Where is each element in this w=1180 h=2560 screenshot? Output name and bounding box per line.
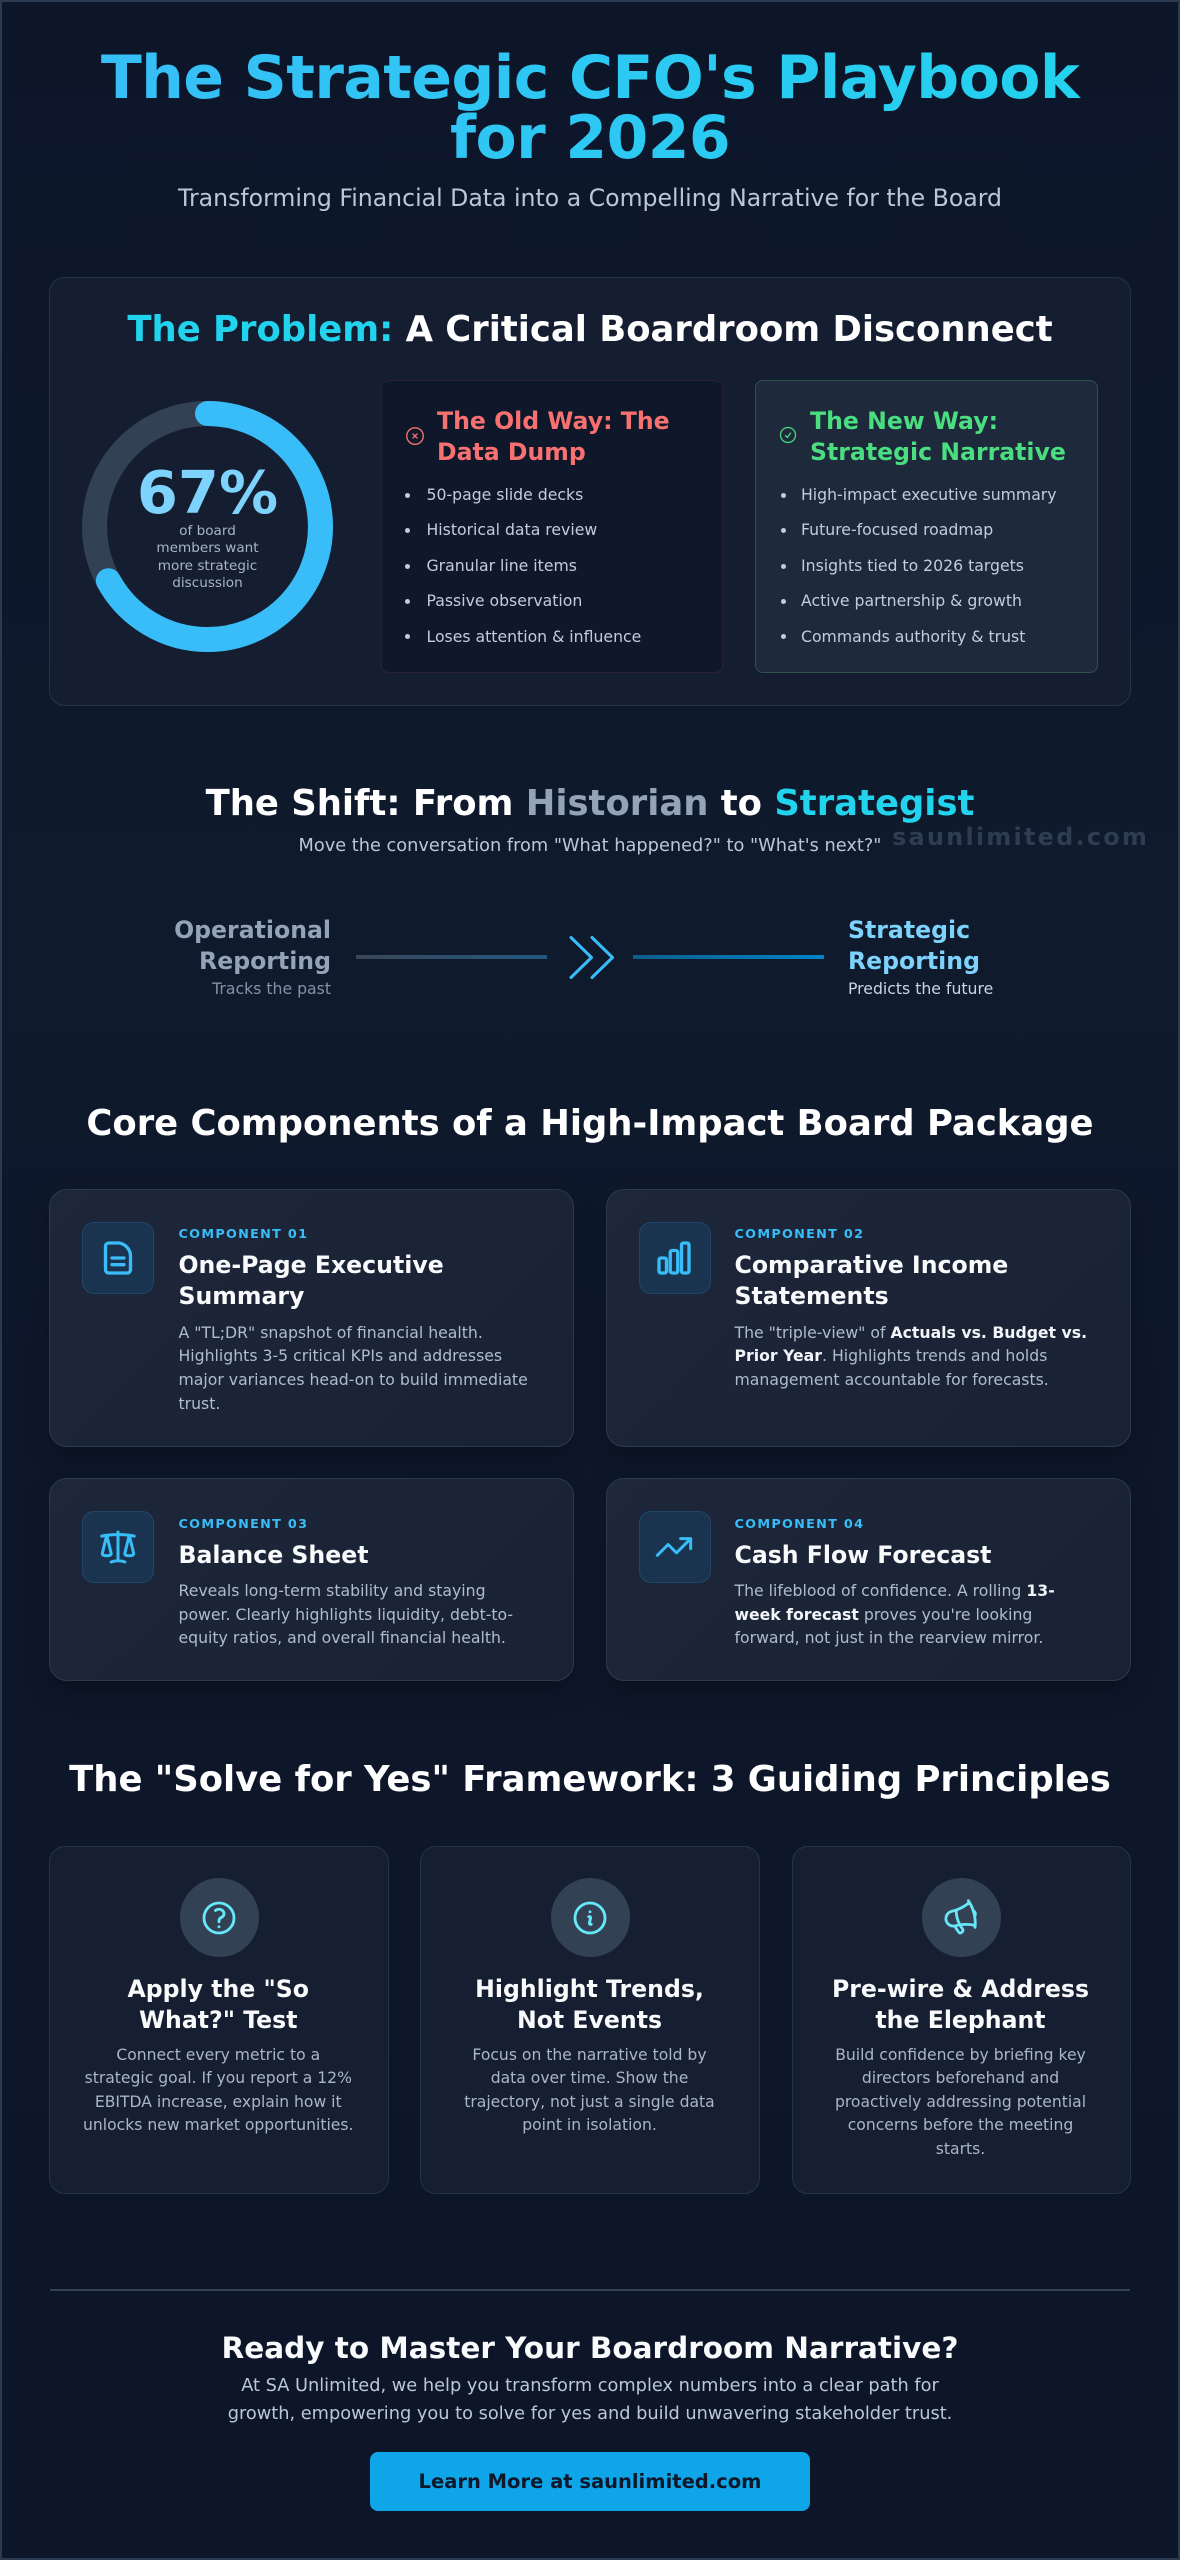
card title: What?" Test (139, 2006, 298, 2034)
panel: the new way (755, 380, 1098, 673)
card title (734, 1251, 1008, 1310)
shift: operational reporting: Operational (174, 916, 331, 944)
donut chart: 67 percent (82, 401, 333, 652)
card body: trajectory, not just a single data (464, 2093, 715, 2111)
text: call to action: growth, empowering you to solve for yes and build unwavering stakeholder trust. (228, 2404, 952, 2424)
panel: the problem (49, 277, 1131, 706)
list: new way: Insights tied to 2026 targets (801, 556, 1024, 575)
list: old way (426, 485, 641, 646)
card title: the Elephant (875, 2006, 1046, 2034)
label: COMPONENT 02 (734, 1227, 864, 1242)
label: COMPONENT 03 (178, 1517, 308, 1532)
card title: Comparative Income (734, 1251, 1008, 1279)
icon: megaphone (922, 1878, 1000, 1957)
heading: the problem: The Problem: A Critical Boardroom Disconnect (127, 309, 1053, 350)
card title: Cash Flow Forecast (734, 1541, 991, 1569)
card body: trust. (178, 1394, 220, 1413)
card: component 02 (606, 1189, 1130, 1447)
card body: Prior Year. Highlights trends and holds (734, 1346, 1047, 1365)
heading: the shift: The Shift: From Historian to Strategist (206, 783, 974, 824)
list: old way: Granular line items (426, 556, 577, 575)
card body (835, 2046, 1086, 2158)
card title: One-Page Executive (178, 1251, 444, 1279)
watermark: saunlimited.com (892, 823, 1149, 851)
heading: call to action: Ready to Master Your Boardroom Narrative? (222, 2331, 958, 2365)
card body (734, 1323, 1087, 1389)
card body (734, 1581, 1055, 1647)
list: old way: Historical data review (426, 520, 597, 539)
card body: strategic goal. If you report a 12% (85, 2069, 352, 2087)
icon: x circle (406, 427, 424, 445)
card body: concerns before the meeting (848, 2116, 1073, 2134)
card title: Highlight Trends, (475, 1974, 704, 2002)
card: component 04 (606, 1478, 1130, 1681)
heading: new way: Strategic Narrative (810, 438, 1066, 466)
list: new way: Active partnership & growth (801, 591, 1022, 610)
shift: operational reporting: Reporting (199, 947, 331, 975)
icon: question (180, 1878, 258, 1957)
icon: bar chart (638, 1222, 710, 1294)
list: new way: Future-focused roadmap (801, 520, 993, 539)
heading: new way (810, 406, 1066, 466)
card title (475, 1974, 704, 2034)
card body (178, 1323, 528, 1413)
card title: Apply the "So (127, 1974, 309, 2002)
card body (178, 1581, 513, 1647)
label: COMPONENT 01 (178, 1227, 308, 1242)
card body: unlocks new market opportunities. (83, 2116, 353, 2134)
card title: Not Events (517, 2006, 662, 2034)
card body: The "triple-view" of Actuals vs. Budget vs. (734, 1323, 1087, 1342)
button: learn more: Learn More at saunlimited.com (419, 2470, 761, 2493)
line: left connector (356, 955, 547, 959)
shift: strategic reporting: Predicts the future (848, 979, 993, 998)
list: new way (801, 485, 1057, 646)
card body: Reveals long-term stability and staying (178, 1581, 486, 1600)
heading: core components: Core Components of a High-Impact Board Package (86, 1103, 1094, 1144)
donut chart: 67 percent: of board (179, 523, 236, 539)
list: old way: Passive observation (426, 591, 582, 610)
shift: operational reporting (174, 916, 331, 998)
title: for 2026 (450, 103, 730, 173)
text: shift subheading: Move the conversation from "What happened?" to "What's next?" (299, 836, 881, 856)
button: learn more (370, 2452, 810, 2511)
shift: strategic reporting: Strategic (848, 916, 970, 944)
list: new way: Commands authority & trust (801, 627, 1025, 646)
icon: scales (82, 1511, 154, 1583)
heading: old way: Data Dump (437, 438, 586, 466)
card body: The lifeblood of confidence. A rolling 13- (734, 1581, 1055, 1600)
subtitle: Transforming Financial Data into a Compelling Narrative for the Board (178, 184, 1002, 212)
card: principle 2 (420, 1846, 760, 2194)
heading: old way: The Old Way: The (437, 406, 670, 434)
card body: data over time. Show the (491, 2069, 688, 2087)
card title (832, 1974, 1089, 2034)
text: call to action: At SA Unlimited, we help you transform complex numbers into a clear path for (241, 2376, 939, 2396)
card body: point in isolation. (522, 2116, 657, 2134)
donut chart: 67 percent: members want (156, 540, 259, 556)
list: old way: Loses attention & influence (426, 627, 641, 646)
title: The Strategic CFO's Playbook (101, 43, 1079, 113)
card body: management accountable for forecasts. (734, 1370, 1049, 1389)
card title: Pre-wire & Address (832, 1974, 1089, 2002)
shift: operational reporting: Tracks the past (212, 979, 331, 998)
heading: solve for yes: The "Solve for Yes" Framework: 3 Guiding Principles (69, 1759, 1111, 1800)
card body: major variances head-on to build immediate (178, 1370, 528, 1389)
card body: week forecast proves you're looking (734, 1605, 1032, 1624)
donut chart: 67 percent: more strategic (158, 558, 257, 574)
card body (83, 2046, 353, 2134)
card body: A "TL;DR" snapshot of financial health. (178, 1323, 483, 1342)
card body: equity ratios, and overall financial health. (178, 1628, 506, 1647)
list: new way: High-impact executive summary (801, 485, 1057, 504)
card body: directors beforehand and (862, 2069, 1059, 2087)
donut chart: 67 percent: 67% (137, 458, 278, 526)
card title (178, 1251, 444, 1310)
shift: strategic reporting: Reporting (848, 947, 980, 975)
card title (127, 1974, 309, 2034)
card: component 01 (49, 1189, 574, 1447)
shift: strategic reporting (848, 916, 993, 998)
card body: Focus on the narrative told by (472, 2046, 707, 2064)
card title: Statements (734, 1282, 889, 1310)
card body: proactively addressing potential (835, 2093, 1086, 2111)
card body: Connect every metric to a (116, 2046, 320, 2064)
donut chart: 67 percent: discussion (172, 575, 243, 591)
icon: double chevron arrow (569, 936, 614, 980)
icon: check circle (780, 426, 796, 444)
card: principle 3 (792, 1846, 1130, 2194)
list: old way: 50-page slide decks (426, 485, 583, 504)
text: call to action (228, 2376, 952, 2424)
card body: power. Clearly highlights liquidity, debt-to- (178, 1605, 513, 1624)
label: COMPONENT 04 (734, 1517, 864, 1532)
panel: the old way (381, 380, 723, 673)
card body: starts. (936, 2140, 985, 2158)
heading: new way: The New Way: (810, 406, 998, 434)
card body: Build confidence by briefing key (835, 2046, 1086, 2064)
card title: Balance Sheet (178, 1541, 368, 1569)
card body: EBITDA increase, explain how it (95, 2093, 342, 2111)
heading: old way (437, 406, 670, 466)
icon: info (550, 1878, 630, 1957)
card: component 03 (49, 1478, 574, 1681)
card body: forward, not just in the rearview mirror. (734, 1628, 1043, 1647)
icon: document (82, 1222, 154, 1294)
icon: trending up (638, 1511, 710, 1583)
line: right connector (633, 955, 824, 959)
card body (464, 2046, 715, 2134)
card: principle 1 (49, 1846, 388, 2194)
card body: Highlights 3-5 critical KPIs and addresses (178, 1346, 502, 1365)
title (40, 48, 1140, 168)
card title: Summary (178, 1282, 304, 1310)
